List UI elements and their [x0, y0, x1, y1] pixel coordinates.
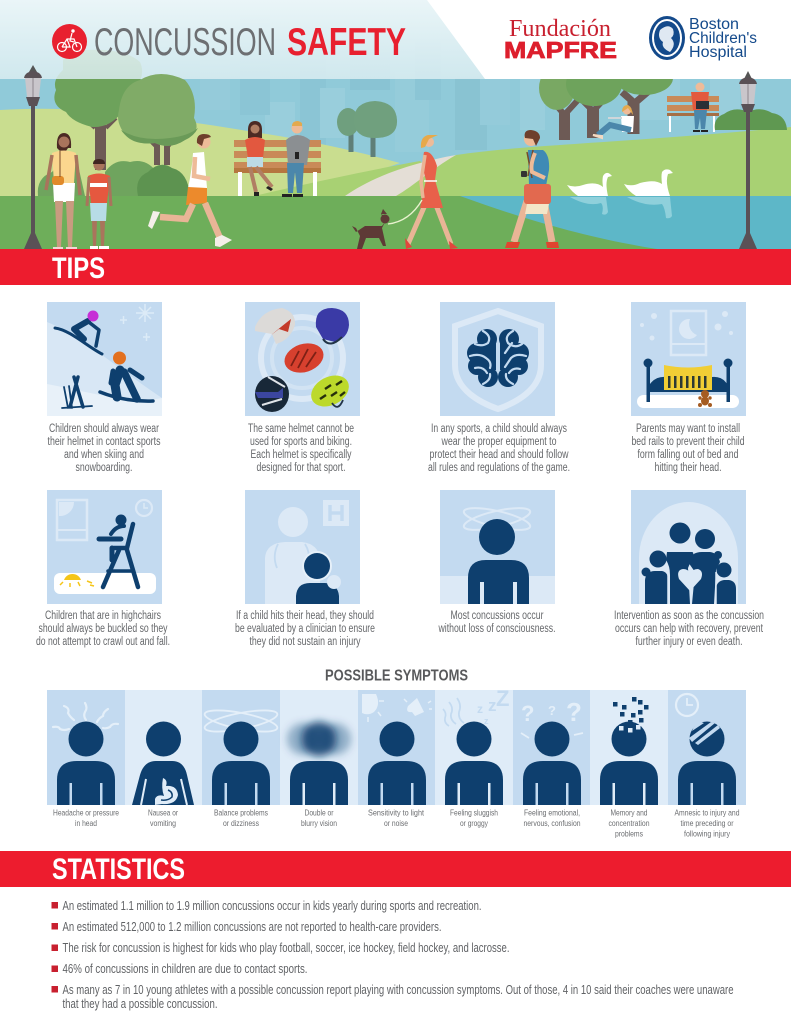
person: woman reading [593, 105, 634, 138]
symptom labels: or dizziness [223, 818, 259, 828]
pond [460, 196, 791, 249]
text: tip 3: wear the proper equipment to [441, 436, 556, 448]
icon: doctor with child [245, 490, 360, 604]
symptom labels: Balance problems [214, 808, 268, 818]
text: tip 5: Children that are in highchairs [45, 610, 161, 622]
symptom: sluggish or groggy: z [484, 716, 489, 726]
statistics list: An estimated 1.1 million to 1.9 million concussions occur in kids yearly during sports and recreation. [62, 899, 482, 913]
tree: background left, hazed top [54, 50, 142, 170]
text: tip 3: In any sports, a child should always [431, 423, 567, 435]
text: tip 3: all rules and regulations of the game. [428, 462, 570, 474]
section banner: tips: TIPS [52, 252, 105, 285]
symptom labels: vomiting [150, 818, 176, 828]
text: tip 3 [428, 423, 570, 474]
right hill [396, 127, 791, 197]
person: woman on bench [245, 121, 273, 196]
title: SAFETY [287, 21, 406, 64]
logo: Fundación MAPFRE: MAPFRE [504, 37, 617, 63]
street lamp right [739, 71, 757, 249]
tip: loss of consciousness [438, 490, 556, 635]
symptom labels [53, 808, 740, 838]
person: runner [148, 134, 232, 247]
text: tip 2: Each helmet is specifically [250, 449, 352, 461]
footpath [345, 155, 456, 196]
logo: Fundación MAPFRE [504, 16, 617, 63]
symptom labels: blurry vision [301, 818, 337, 828]
symptom: emotional, nervous, confusion: ? [566, 697, 582, 727]
symptom: balance problems [202, 690, 280, 805]
bushes [38, 161, 190, 196]
symptom labels: problems [615, 828, 643, 838]
text: tip 5: do not attempt to crawl out and fall. [36, 636, 170, 648]
symptom: sensitivity to light or noise [358, 690, 435, 805]
text: tip 4: Parents may want to install [636, 423, 740, 435]
text: tip 5: should always be buckled so they [38, 623, 168, 635]
statistics list: 46% of concussions in children are due to contact sports. [62, 962, 308, 976]
symptom: sluggish or groggy: z [477, 702, 483, 716]
text: tip 7 [438, 610, 556, 635]
text: tip 7: Most concussions occur [450, 610, 544, 622]
symptom labels: Double or [304, 808, 334, 818]
text: tip 6: be evaluated by a clinician to ensure [235, 623, 375, 635]
text: tip 1: Children should always wear [49, 423, 159, 435]
tip: highchairs [36, 490, 170, 648]
heading: possible symptoms: POSSIBLE SYMPTOMS [325, 668, 468, 684]
section banner: statistics [0, 851, 791, 887]
tip: helmets in contact sports, skiing [47, 302, 162, 474]
text: tip 2: used for sports and biking. [250, 436, 352, 448]
icon: family with heart [631, 490, 746, 604]
text: tip 2: designed for that sport. [256, 462, 346, 474]
haze over sky [0, 0, 791, 79]
text: tip 2: The same helmet cannot be [248, 423, 354, 435]
symptom: headache [47, 690, 125, 805]
mid green hill [250, 161, 460, 197]
statistics list: that they had a possible concussion. [62, 997, 218, 1011]
text: tip 8 [614, 610, 764, 648]
symptom: sluggish or groggy: z [488, 696, 496, 715]
logo: Boston Children's Hospital: Boston [689, 16, 739, 33]
symptom labels: Nausea or [148, 808, 178, 818]
symptom labels: Memory and [610, 808, 648, 818]
mid trees [337, 101, 397, 157]
street lamp left [24, 65, 42, 249]
bench: middle [234, 140, 321, 196]
text: tip 5 [36, 610, 170, 648]
symptom: emotional, nervous, confusion [513, 690, 590, 805]
symptom labels: Feeling emotional, [524, 808, 580, 818]
logo: Boston Children's Hospital [649, 16, 757, 61]
text: tip 1: snowboarding. [76, 462, 132, 474]
symptom labels: in head [75, 818, 97, 828]
statistics list [52, 899, 734, 1011]
text: tip 1: their helmet in contact sports [48, 436, 161, 448]
text: tip 7: without loss of consciousness. [438, 623, 556, 635]
symptom: blurry vision [280, 690, 358, 805]
text: tip 4: hitting their head. [654, 462, 722, 474]
symptom: sluggish or groggy [435, 686, 513, 805]
symptom: memory and concentration [590, 690, 668, 805]
tree: foreground left [118, 74, 198, 165]
white header area [427, 0, 791, 79]
text: tip 1 [48, 423, 161, 474]
symptom labels: or noise [384, 818, 408, 828]
symptom: sluggish or groggy: Z [496, 686, 509, 711]
logo: Fundación MAPFRE: Fundación [509, 16, 611, 42]
section banner: statistics: STATISTICS [52, 853, 185, 886]
skyline [120, 15, 740, 152]
symptom labels: Sensitivity to light [368, 808, 425, 818]
symptom labels: nervous, confusion [524, 818, 581, 828]
icon: cyclist [52, 24, 87, 59]
text: tip 4 [632, 423, 744, 474]
person: woman walking [388, 135, 458, 249]
text: tip 4: bed rails to prevent their child [632, 436, 744, 448]
statistics list: The risk for concussion is highest for kids who play football, soccer, ice hockey, field hockey, and lacrosse. [62, 941, 510, 955]
symptom: amnesia [668, 690, 746, 805]
statistics list: An estimated 512,000 to 1.2 million concussions are not reported to health-care providers. [62, 920, 442, 934]
foreground ground [0, 196, 791, 249]
symptom: nausea [125, 690, 202, 805]
text: tip 8: further injury or even death. [636, 636, 742, 648]
symptom labels: or groggy [460, 818, 489, 828]
light hill left [0, 109, 400, 197]
symptom: emotional, nervous, confusion: ? [548, 703, 556, 718]
icon: person with dizzy orbits [440, 490, 555, 604]
icon: skier and snowboarder [47, 302, 162, 416]
hero: park scene [0, 0, 791, 250]
tip: clinician evaluation [235, 490, 375, 648]
person: walker with camera [505, 130, 559, 248]
text: tip 1: and when skiing and [64, 449, 144, 461]
bench and man with laptop [667, 82, 719, 132]
tip: proper equipment [428, 302, 570, 474]
logo: Boston Children's Hospital: Children's [689, 30, 757, 47]
dog [352, 209, 390, 249]
icon: child in highchair [47, 490, 162, 604]
tip: helmet specificity [245, 302, 360, 474]
symptoms strip [47, 686, 746, 805]
swans [567, 169, 673, 218]
symptom: emotional, nervous, confusion: ? [521, 701, 534, 726]
symptom labels: Feeling sluggish [450, 808, 498, 818]
tip: bed rails [631, 302, 746, 474]
section banner: tips [0, 249, 791, 285]
text: tip 4: form falling out of bed and [638, 449, 738, 461]
symptom labels: time preceding or [680, 818, 734, 828]
logo: Boston Children's Hospital: Hospital [689, 44, 747, 61]
symptom labels: Headache or pressure [53, 808, 119, 818]
text: tip 6: they did not sustain an injury [250, 636, 361, 648]
text: tip 2 [248, 423, 354, 474]
symptom labels: concentration [608, 818, 650, 828]
symptom labels: Amnesic to injury and [674, 808, 740, 818]
text: tip 3: protect their head and should follow [430, 449, 569, 461]
symptom labels: following injury [684, 828, 731, 838]
icon: brain in shield [440, 302, 555, 416]
person: mother [46, 133, 80, 249]
right side trees [539, 61, 673, 140]
title: CONCUSSION [94, 21, 276, 64]
text: tip 6 [235, 610, 375, 648]
person: man on bench [282, 121, 310, 197]
text: tip 6: If a child hits their head, they should [236, 610, 374, 622]
icon: five helmets [245, 302, 360, 416]
tip: early intervention [614, 490, 764, 648]
person: boy [87, 159, 111, 249]
icon: bed with rail and teddy [631, 302, 746, 416]
bushes right [715, 109, 787, 130]
